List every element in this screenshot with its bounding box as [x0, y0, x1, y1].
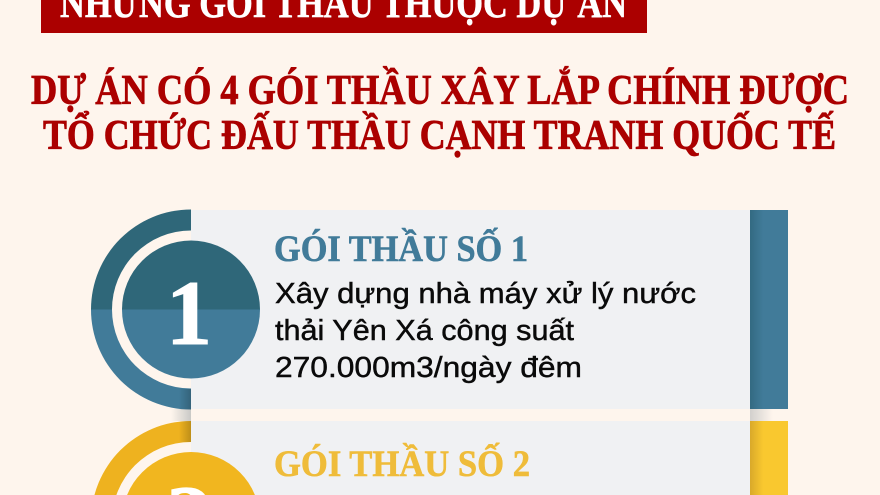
- package description: Xây dựng nhà máy xử lý nước: [275, 278, 696, 310]
- package title: GÓI THẦU SỐ 1: [274, 226, 528, 270]
- package description: [275, 278, 696, 384]
- card background: [191, 210, 750, 409]
- number disc: [122, 452, 260, 495]
- panel: package 1: [91, 210, 788, 410]
- package description: 270.000m3/ngày đêm: [275, 352, 582, 384]
- panel: package 2: [91, 421, 788, 495]
- header banner: [41, 0, 647, 33]
- outer ring: [91, 210, 191, 410]
- side bar: [750, 210, 788, 409]
- side bar: [750, 421, 788, 495]
- card background: [191, 421, 750, 495]
- package description: thải Yên Xá công suất: [275, 315, 574, 347]
- number disc: 1: [166, 262, 212, 364]
- outer ring: [94, 421, 191, 495]
- main heading: [31, 66, 849, 159]
- number disc: [122, 241, 260, 379]
- package title: GÓI THẦU SỐ 2: [274, 441, 530, 485]
- connector shadows between cards: [171, 409, 788, 421]
